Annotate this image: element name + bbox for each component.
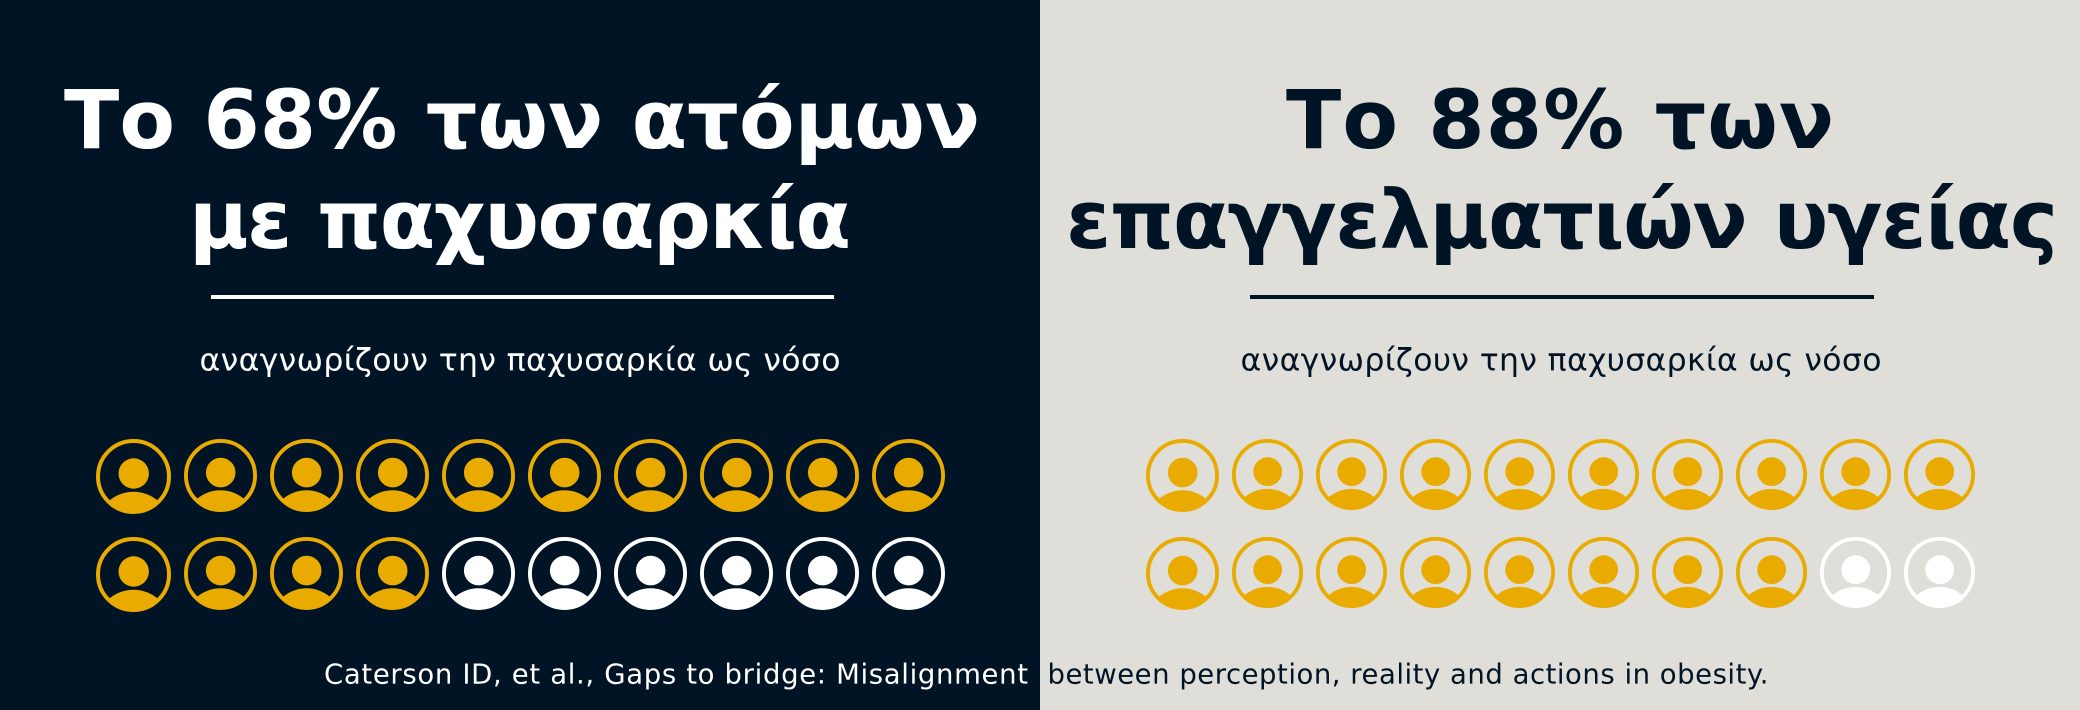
heading: 68% of people with obesity [64, 74, 980, 268]
heading: 68% of people with obesity: Το 68% των ατόμων [64, 74, 980, 168]
divider line right [1250, 295, 1874, 299]
heading: 88% of health professionals [1066, 74, 2058, 268]
citation right part: between perception, reality and actions in obesity. [1048, 658, 1768, 690]
icon grid: 88 percent [1148, 441, 1973, 608]
icon grid: 68 percent [98, 441, 943, 610]
subheading right: αναγνωρίζουν την παχυσαρκία ως νόσο [1240, 342, 1882, 378]
heading: 88% of health professionals: Το 88% των [1286, 74, 1834, 168]
subheading left: αναγνωρίζουν την παχυσαρκία ως νόσο [200, 342, 840, 378]
heading: 68% of people with obesity: με παχυσαρκία [189, 174, 851, 268]
citation left part: Caterson ID, et al., Gaps to bridge: Misalignment [324, 658, 1028, 690]
panel: right professionals [1040, 0, 2080, 710]
panel: left patients [0, 0, 1040, 710]
divider line left [211, 295, 834, 299]
heading: 88% of health professionals: επαγγελματιών υγείας [1066, 174, 2058, 268]
